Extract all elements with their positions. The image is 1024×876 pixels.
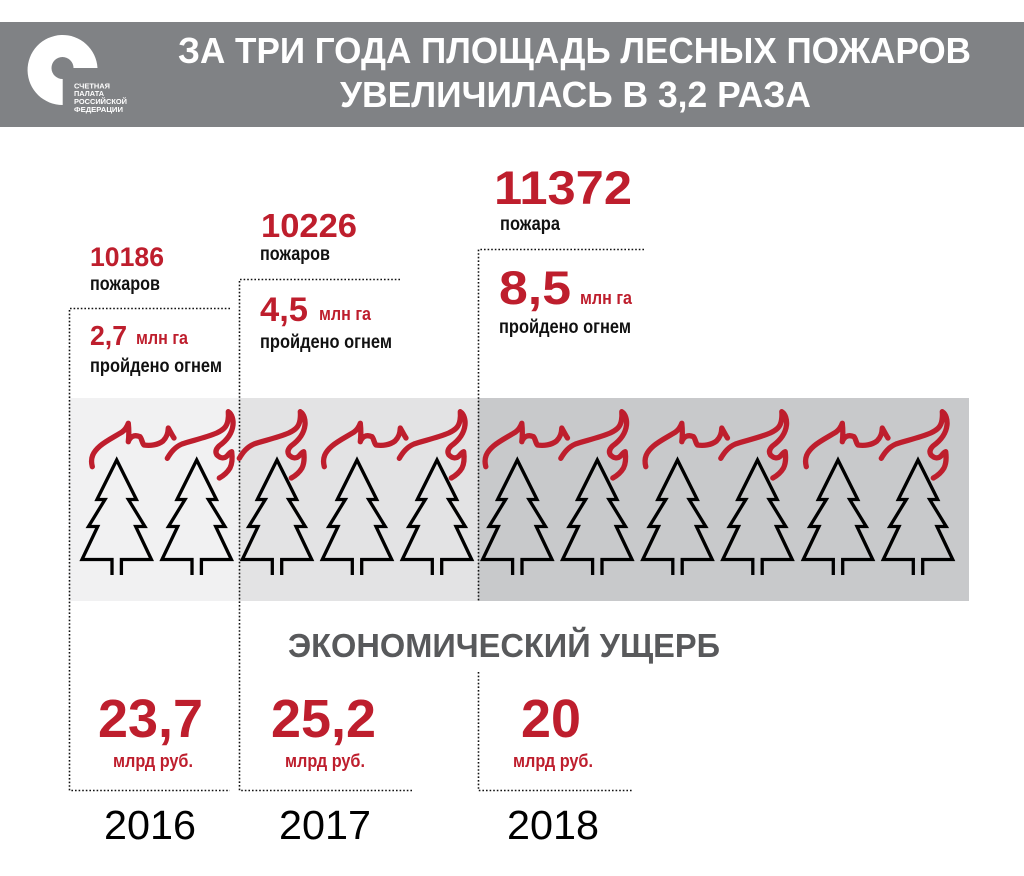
band: 2017 background	[239, 398, 478, 601]
heading: economic damage: ЭКОНОМИЧЕСКИЙ УЩЕРБ	[288, 626, 720, 664]
2016 fires	[90, 242, 164, 295]
damage 2017: 25,2	[271, 689, 376, 749]
band: 2016 background	[69, 398, 239, 601]
2017 area: млн га	[319, 304, 372, 324]
year 2017: 2017	[279, 802, 371, 848]
title	[178, 30, 971, 115]
header band	[0, 22, 1024, 127]
2018 area: млн га	[580, 288, 633, 308]
2016 area: 2,7	[90, 320, 127, 351]
flames row	[92, 412, 947, 478]
2017 area: пройдено огнем	[260, 332, 392, 353]
damage 2016: 23,7	[98, 689, 203, 749]
dotted frames	[70, 250, 644, 790]
2017 fires	[260, 207, 357, 265]
2017 area	[260, 291, 392, 353]
logo: Счетная палата: ПАЛАТА	[74, 89, 104, 98]
logo: Счетная палата	[28, 35, 127, 114]
2018 fires: пожара	[500, 214, 560, 235]
2016 area: млн га	[136, 328, 189, 348]
2016 fires: пожаров	[90, 274, 160, 295]
trees row	[82, 460, 953, 575]
title: УВЕЛИЧИЛАСЬ В 3,2 РАЗА	[340, 74, 811, 115]
2016 area: пройдено огнем	[90, 356, 222, 377]
2017 area: 4,5	[260, 291, 308, 329]
year 2018: 2018	[507, 802, 599, 848]
damage 2018	[513, 689, 593, 771]
2018 fires: 11372	[494, 161, 632, 214]
damage 2018: млрд руб.	[513, 751, 593, 771]
2017 fires: пожаров	[260, 244, 330, 265]
2016 fires: 10186	[90, 242, 164, 272]
2016 area	[90, 320, 222, 377]
2018 area	[499, 261, 633, 338]
damage 2017: млрд руб.	[285, 751, 365, 771]
damage 2016: млрд руб.	[113, 751, 193, 771]
2018 area: 8,5	[499, 261, 571, 314]
2018 fires	[494, 161, 632, 235]
logo: Счетная палата: СЧЕТНАЯ	[74, 82, 110, 90]
band: 2018 background	[478, 398, 969, 601]
logo: Счетная палата: РОССИЙСКОЙ	[74, 97, 127, 106]
title: ЗА ТРИ ГОДА ПЛОЩАДЬ ЛЕСНЫХ ПОЖАРОВ	[178, 30, 971, 71]
logo: Счетная палата: ФЕДЕРАЦИИ	[74, 105, 123, 114]
2018 area: пройдено огнем	[499, 317, 631, 338]
damage 2018: 20	[521, 689, 581, 749]
year 2016: 2016	[104, 802, 196, 848]
2017 fires: 10226	[261, 207, 357, 244]
